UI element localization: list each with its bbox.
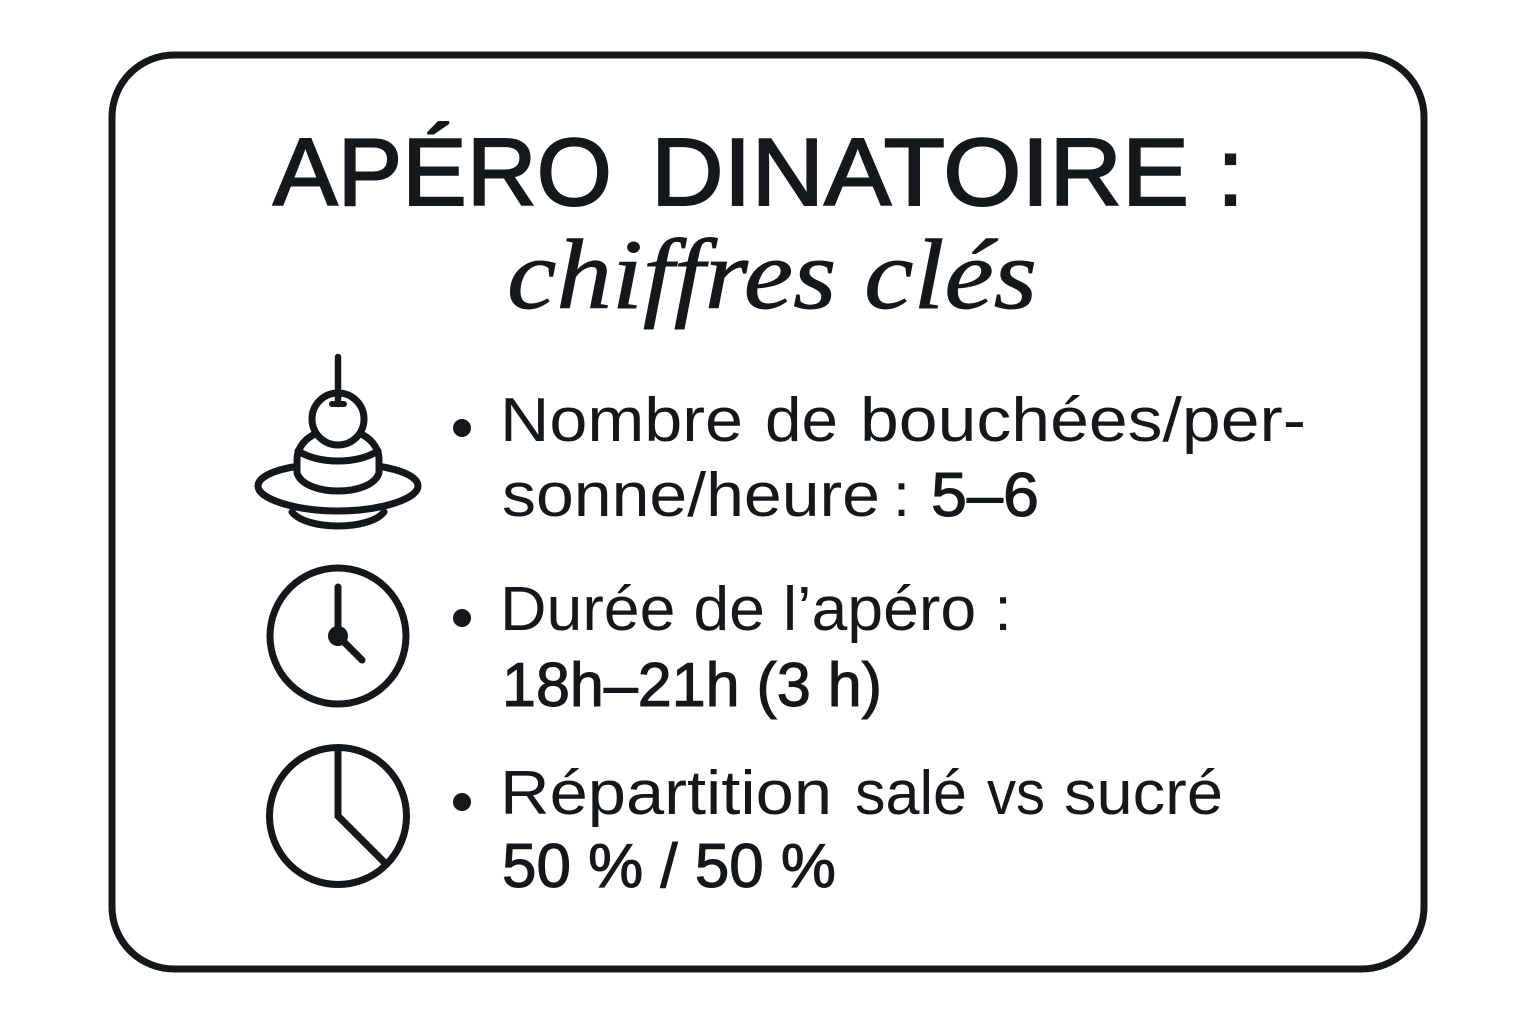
label: vs (987, 759, 1045, 828)
title: : (1217, 119, 1244, 226)
title (273, 119, 1244, 226)
bullet (453, 609, 471, 627)
value: 18h–21h (3 h) (502, 651, 882, 720)
bullet (453, 793, 471, 811)
value: 50 % / 50 % (502, 832, 836, 901)
title: APÉRO (273, 119, 612, 226)
label line 1: Nombre (500, 386, 743, 455)
subtitle: chiffres clés (507, 219, 1037, 330)
value: 5–6 (931, 461, 1039, 530)
label: Répartition (500, 759, 832, 828)
panel: rounded card (112, 55, 1424, 969)
icon: canapé on a plate (258, 357, 418, 526)
item: duration (453, 575, 1012, 720)
label line 2: : (893, 461, 910, 530)
label: Durée de l’apéro : (500, 575, 1012, 644)
label line 1: de (765, 386, 838, 455)
icon: pie chart (270, 748, 406, 884)
title: DINATOIRE (651, 119, 1189, 226)
icon: clock (270, 568, 406, 704)
label: salé (855, 759, 967, 828)
label line 1: bouchées/per- (860, 386, 1306, 455)
label line 2: sonne/heure (502, 461, 880, 530)
label: sucré (1064, 759, 1223, 828)
label (500, 759, 1223, 828)
bullet (453, 419, 471, 437)
item: savoury vs sweet split (453, 759, 1223, 901)
label line 1 (500, 386, 1306, 455)
item: bite count (453, 386, 1306, 530)
